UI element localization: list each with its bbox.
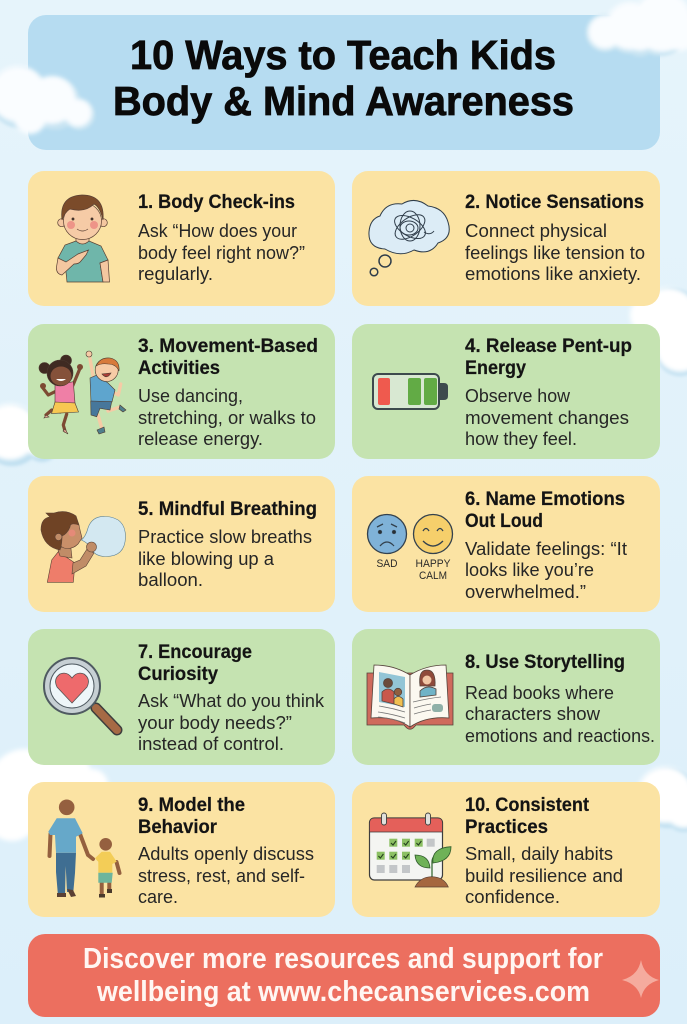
text block: body feel right now?”	[138, 242, 305, 263]
text block	[465, 843, 623, 907]
text block	[138, 385, 316, 449]
text block: care.	[138, 886, 178, 907]
title banner	[28, 15, 660, 150]
heading	[138, 641, 252, 685]
text block: Observe how	[465, 385, 571, 406]
call to action: Discover more resources and support for	[83, 943, 603, 975]
panel: 5 mindful breathing	[28, 476, 335, 612]
heading	[465, 335, 632, 379]
text block: characters show	[465, 703, 601, 724]
title: 10 Ways to Teach Kids	[130, 32, 556, 78]
title	[113, 32, 574, 124]
heading: Behavior	[138, 816, 217, 838]
panel: 8 use storytelling	[352, 629, 660, 765]
legend labels: HAPPY	[416, 558, 451, 570]
text block: release energy.	[138, 428, 263, 449]
heading: Curiosity	[138, 663, 218, 685]
text block: regularly.	[138, 263, 213, 284]
icon: battery	[373, 374, 448, 409]
heading	[138, 335, 318, 379]
heading: 3. Movement-Based	[138, 335, 318, 357]
text block	[465, 385, 629, 449]
call to action	[83, 943, 603, 1008]
icon: two children jumping	[39, 351, 126, 434]
text block: emotions like anxiety.	[465, 263, 641, 284]
text block: stress, rest, and self-	[138, 865, 305, 886]
icon: adult and child holding hands	[48, 800, 119, 898]
panel: 4 release pent-up energy	[352, 324, 660, 459]
text block: looks like you’re	[465, 559, 594, 580]
text block: overwhelmed.”	[465, 581, 586, 602]
panel: 6 name emotions out loud	[352, 476, 660, 612]
heading: 2. Notice Sensations	[465, 191, 644, 213]
icon: calendar with plant	[370, 813, 451, 887]
text block	[138, 690, 325, 754]
text block	[465, 682, 655, 746]
heading: Practices	[465, 816, 548, 838]
text block: Practice slow breaths	[138, 526, 312, 547]
text block: Ask “What do you think	[138, 690, 325, 711]
text block: your body needs?”	[138, 712, 292, 733]
text block	[465, 538, 627, 602]
icon: thought cloud with scribble	[369, 200, 449, 276]
footer banner	[28, 934, 660, 1017]
panel: 1 body check-ins	[28, 171, 335, 306]
icon: open book	[367, 665, 453, 729]
heading	[465, 794, 589, 838]
icon: sad face	[368, 514, 406, 554]
text block	[138, 526, 312, 590]
heading	[465, 488, 625, 532]
heading: 8. Use Storytelling	[465, 651, 625, 673]
icon: happy face	[414, 514, 452, 554]
text block: Ask “How does your	[138, 220, 297, 241]
text block: Small, daily habits	[465, 843, 613, 864]
heading: 7. Encourage	[138, 641, 252, 663]
panel: 3 movement-based activities	[28, 324, 335, 459]
text block: Connect physical	[465, 220, 607, 241]
text block	[465, 220, 645, 284]
text block	[138, 843, 314, 907]
heading: 6. Name Emotions	[465, 488, 625, 510]
text block: emotions and reactions.	[465, 725, 655, 746]
heading: 5. Mindful Breathing	[138, 498, 317, 520]
heading: 4. Release Pent-up	[465, 335, 632, 357]
icon: magnifier with heart	[44, 658, 117, 730]
background clouds behind panels	[0, 288, 687, 841]
icon: sparkle	[622, 960, 659, 998]
text block	[138, 220, 305, 284]
text block: instead of control.	[138, 733, 284, 754]
call to action: wellbeing at www.checanservices.com	[96, 976, 590, 1008]
text block: movement changes	[465, 407, 629, 428]
panel: 7 encourage curiosity	[28, 629, 335, 765]
heading: 9. Model the	[138, 794, 245, 816]
text block: confidence.	[465, 886, 560, 907]
heading: 1. Body Check-ins	[138, 191, 295, 213]
text block: Read books where	[465, 682, 614, 703]
icon: boy pointing at chest	[56, 195, 110, 282]
panel: 10 consistent practices	[352, 782, 660, 917]
heading: 10. Consistent	[465, 794, 589, 816]
title: Body & Mind Awareness	[113, 78, 574, 124]
text block: like blowing up a	[138, 548, 275, 569]
panel: 9 model the behavior	[28, 782, 335, 917]
panel: 2 notice sensations	[352, 171, 660, 306]
icon: child blowing balloon	[41, 512, 126, 582]
text block: Adults openly discuss	[138, 843, 314, 864]
legend labels: CALM	[419, 570, 447, 582]
text block: build resilience and	[465, 865, 623, 886]
text block: feelings like tension to	[465, 242, 645, 263]
heading: Activities	[138, 357, 220, 379]
legend labels: SAD	[376, 558, 398, 570]
heading	[138, 794, 245, 838]
text block: Validate feelings: “It	[465, 538, 627, 559]
text block: stretching, or walks to	[138, 407, 316, 428]
text block: balloon.	[138, 569, 203, 590]
text block: how they feel.	[465, 428, 577, 449]
heading: Out Loud	[465, 510, 543, 532]
heading: Energy	[465, 357, 526, 379]
legend labels	[376, 558, 451, 582]
text block: Use dancing,	[138, 385, 243, 406]
clouds over title banner	[0, 0, 687, 134]
